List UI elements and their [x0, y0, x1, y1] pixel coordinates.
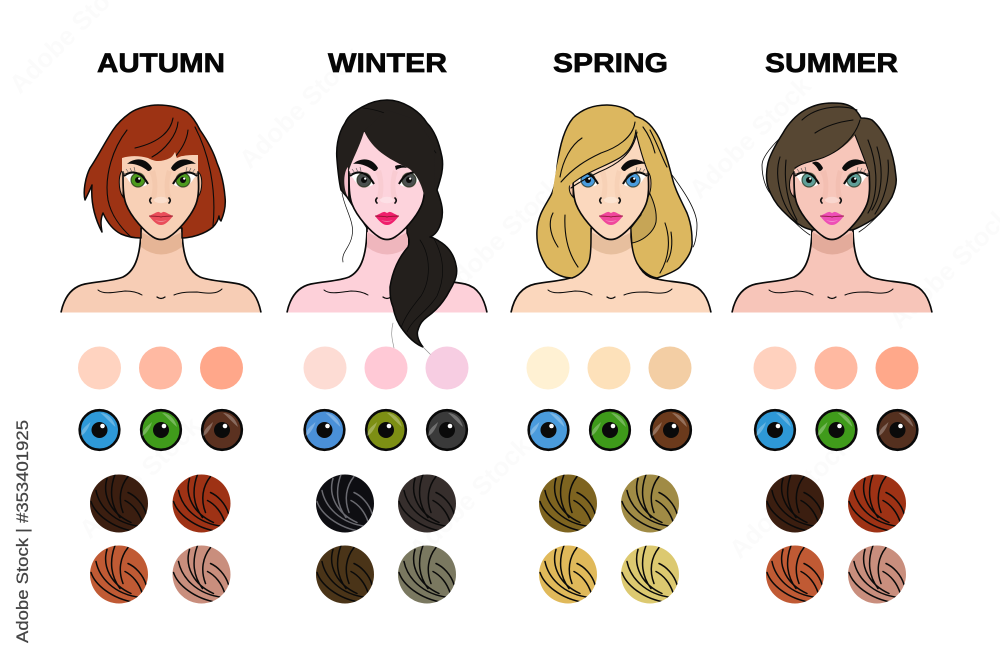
panel: summer	[732, 48, 932, 604]
eyebrow stub	[395, 165, 407, 170]
neck and shoulders	[61, 226, 261, 312]
nose	[149, 170, 172, 203]
skin swatches	[526, 346, 692, 390]
panel: autumn	[61, 48, 261, 604]
grey eyes	[349, 167, 424, 187]
ear	[790, 172, 794, 197]
eyebrow	[621, 159, 646, 171]
eyebrow left	[353, 159, 378, 171]
stray hairs	[762, 138, 879, 235]
stray hair	[342, 193, 353, 262]
neck shadow	[141, 232, 182, 254]
hair strands	[550, 127, 672, 273]
face	[349, 132, 425, 240]
heading: spring: SPRING	[553, 48, 668, 78]
neck and shoulders	[511, 226, 711, 312]
neck and shoulders	[287, 226, 487, 312]
eye swatches	[755, 410, 917, 450]
panel: spring	[511, 48, 711, 604]
fringe strands	[560, 122, 637, 188]
blonde hair	[537, 105, 692, 278]
eye swatches	[529, 410, 691, 450]
nose	[820, 170, 843, 203]
lips	[375, 212, 399, 225]
collarbones	[769, 289, 893, 298]
collarbones	[98, 289, 222, 298]
ear	[344, 167, 348, 197]
green eyes	[123, 167, 198, 187]
collarbones	[324, 289, 448, 298]
heading: summer: SUMMER	[765, 48, 898, 78]
nose	[375, 170, 398, 203]
lips	[599, 212, 623, 225]
neck shadow	[367, 232, 408, 254]
portrait: autumn woman	[61, 105, 261, 312]
face	[122, 152, 199, 240]
eyebrows	[127, 159, 196, 171]
skin swatches	[304, 346, 468, 390]
jaw line	[349, 172, 425, 240]
hair strands	[778, 107, 888, 222]
neck shadow	[812, 232, 853, 254]
jaw line	[794, 172, 870, 240]
ears	[119, 170, 202, 197]
side-swept fringe	[364, 110, 435, 195]
heading: winter: WINTER	[328, 48, 447, 78]
teal eyes	[794, 167, 869, 187]
eyebrows	[812, 159, 867, 171]
eye swatches	[80, 410, 242, 450]
nose	[599, 170, 622, 203]
blue eyes	[573, 167, 648, 187]
collarbones	[548, 289, 672, 298]
skin swatches	[754, 346, 918, 390]
panel: winter	[287, 48, 487, 604]
right face edge	[855, 135, 869, 172]
neck shadow	[591, 232, 632, 254]
lips	[149, 212, 173, 225]
hair strands	[363, 108, 443, 332]
stray ponytail hairs	[392, 323, 431, 355]
eye swatches	[305, 410, 467, 450]
hair strands	[107, 118, 214, 237]
jaw line	[573, 172, 649, 240]
portrait: summer woman	[732, 103, 932, 312]
jaw line	[123, 172, 199, 240]
stock id vertical text: Adobe Stock | #353401925	[14, 420, 32, 643]
lips	[820, 212, 844, 225]
ears	[569, 172, 651, 197]
portrait: winter woman	[287, 100, 487, 355]
red bob hair	[84, 105, 225, 238]
dark hair behind neck	[631, 190, 656, 243]
hair swatches	[316, 474, 456, 604]
heading: autumn: AUTUMN	[97, 48, 225, 78]
right face edge	[636, 133, 648, 172]
hair swatches	[90, 474, 230, 604]
hair swatches	[766, 474, 906, 604]
hair swatches	[539, 474, 679, 604]
portrait: spring woman	[511, 105, 711, 312]
face	[573, 133, 649, 240]
black side ponytail hair	[337, 100, 457, 347]
skin swatches	[78, 346, 243, 390]
brown bob hair	[766, 103, 896, 230]
face	[794, 135, 870, 240]
neck and shoulders	[732, 226, 932, 312]
sweeping fringe	[551, 107, 636, 205]
stray hair	[672, 175, 697, 247]
